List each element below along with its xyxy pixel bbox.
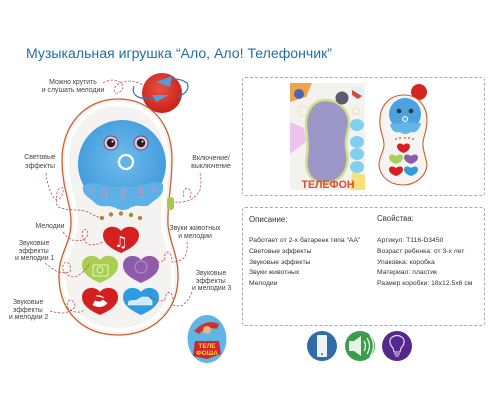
label: knob: и слушать мелодии bbox=[42, 87, 104, 94]
icon: red knob with rotation arrows bbox=[133, 73, 188, 113]
green power button bbox=[167, 197, 174, 210]
properties list: Артикул: T116-D3450 bbox=[377, 237, 443, 244]
label: melodies: Мелодии bbox=[36, 223, 64, 230]
label: power bbox=[191, 154, 231, 170]
label: sound effects 2: и мелодии 2 bbox=[9, 314, 48, 321]
label: sound effects 3: Звуковые bbox=[196, 270, 226, 277]
heart button: music: ♫ bbox=[114, 233, 128, 251]
heart button: car bbox=[123, 288, 159, 315]
label: power: Включение/ bbox=[192, 155, 230, 162]
label: sound effects 3: эффекты bbox=[196, 278, 226, 285]
label: animal sounds bbox=[170, 225, 220, 240]
label: sound effects 1 bbox=[15, 240, 54, 262]
heart button: animal bbox=[123, 256, 159, 283]
label: sound effects 3: и мелодии 3 bbox=[192, 285, 231, 292]
phone body bbox=[59, 99, 178, 335]
small phone photo bbox=[379, 84, 427, 185]
icon: battery bbox=[307, 331, 337, 361]
label: sound effects 1: Звуковые bbox=[19, 240, 49, 247]
title: Музыкальная игрушка “Ало, Ало! Телефончик” bbox=[26, 45, 332, 61]
icon: light bulb bbox=[382, 331, 412, 361]
description list: Звуки животных bbox=[249, 269, 299, 276]
toy box photo: ТЕЛЕФОН bbox=[302, 179, 355, 191]
properties heading: Свойства: bbox=[377, 214, 414, 223]
properties list: Возраст ребенка: от 3-х лет bbox=[377, 248, 464, 255]
properties list: Размер коробки: 18х12.5х6 см bbox=[377, 280, 472, 287]
description heading: Описание: bbox=[249, 215, 288, 224]
description list: Работает от 2-х батареек типа “АА” bbox=[249, 237, 360, 244]
description list: Световые эффекты bbox=[249, 248, 311, 255]
label: sound effects 2: эффекты bbox=[13, 307, 43, 314]
brand badge bbox=[188, 315, 226, 363]
label: sound effects 2: Звуковые bbox=[13, 299, 43, 306]
label: sound effects 1: эффекты bbox=[19, 248, 49, 255]
heart button: phone bbox=[82, 288, 118, 315]
octopus face bbox=[78, 120, 166, 210]
panel: description bbox=[242, 207, 485, 326]
description list: Звуковые эффекты bbox=[249, 259, 310, 266]
white plate highlight bbox=[64, 104, 173, 330]
properties list bbox=[377, 237, 472, 287]
dashed callout lines bbox=[45, 80, 201, 313]
label: animal sounds: и мелодии bbox=[178, 233, 212, 240]
label: light effects: эффекты bbox=[25, 162, 55, 170]
speaker dots bbox=[100, 211, 142, 220]
panel: product photos bbox=[242, 77, 485, 196]
brand badge: ТЕЛЕ bbox=[198, 343, 216, 350]
label: knob: Можно крутить bbox=[49, 79, 97, 86]
properties list: Материал: пластик bbox=[377, 269, 437, 276]
toy box photo bbox=[290, 83, 365, 191]
label: light effects: Световые bbox=[24, 154, 56, 161]
label: sound effects 3 bbox=[192, 270, 231, 292]
icon: sound bbox=[345, 331, 375, 361]
label: animal sounds: Звуки животных bbox=[170, 225, 220, 232]
label: knob bbox=[42, 79, 104, 94]
label: sound effects 1: и мелодии 1 bbox=[15, 255, 54, 262]
description list bbox=[249, 237, 360, 287]
brand badge: ФОША bbox=[196, 350, 218, 357]
label: light effects bbox=[24, 154, 56, 170]
heart button: camera bbox=[82, 256, 118, 283]
heart button: music bbox=[103, 227, 139, 253]
label: sound effects 2 bbox=[9, 299, 48, 321]
properties list: Упаковка: коробка bbox=[377, 259, 435, 266]
description list: Мелодии bbox=[249, 280, 278, 287]
label: power: выключение bbox=[191, 163, 231, 170]
